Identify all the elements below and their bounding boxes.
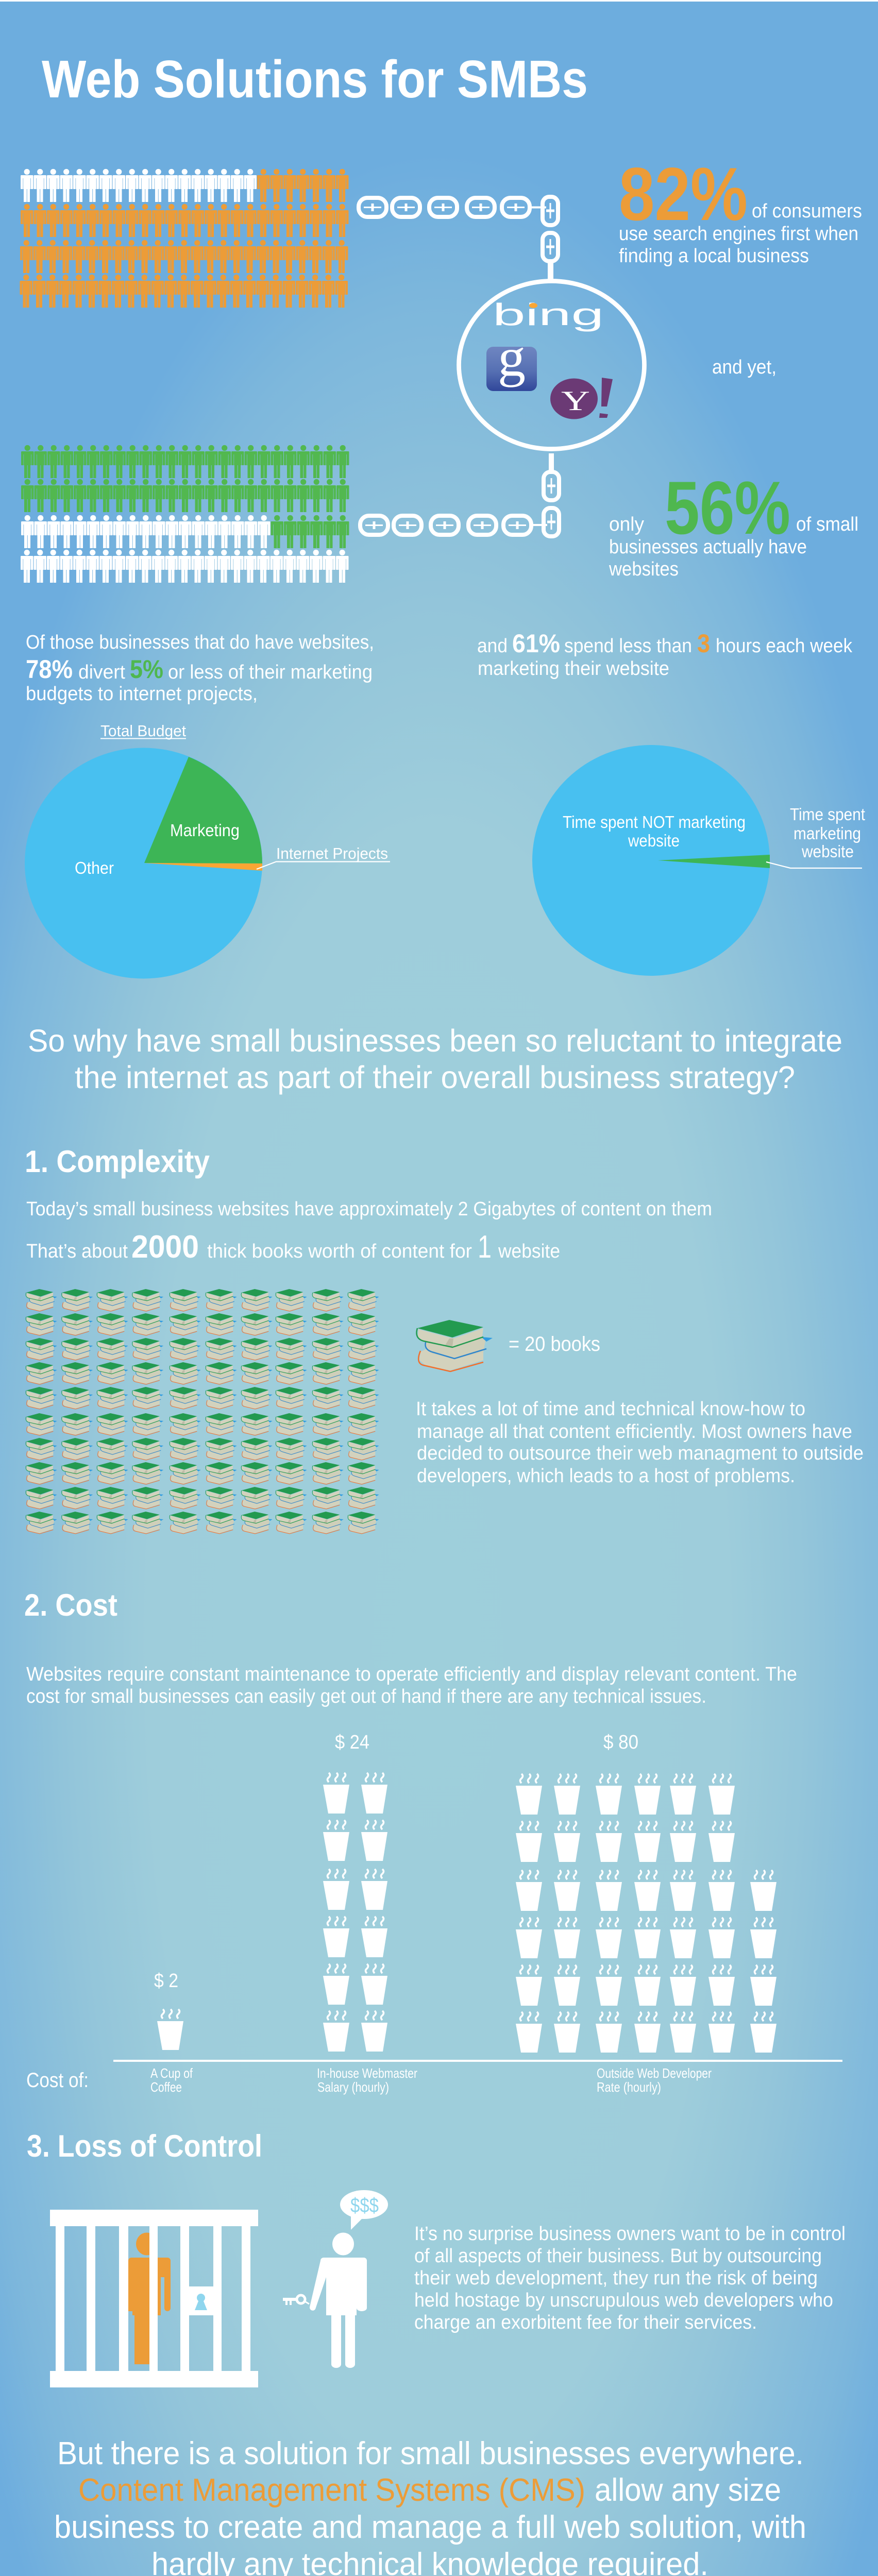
text: loss of control body: their web development, they run the risk of being [414,2267,818,2289]
figure: developer with key [283,2233,367,2368]
text: complexity intro: website [498,1241,560,1262]
text: complexity body: manage all that content efficiently. Most owners have [417,1421,852,1443]
section heading: complexity: 1. Complexity [25,1144,210,1179]
pie chart: total budget: Other [75,858,114,877]
pictogram: 82 percent people grid [20,169,348,308]
category: developer: Rate (hourly) [597,2079,661,2095]
text: budget stat: 78% [26,655,73,684]
callout: time spent marketing: website [801,842,854,861]
section heading: cost: 2. Cost [24,1588,117,1622]
chain: bottom [360,453,559,536]
icon: bing logo [493,297,604,332]
text: complexity intro: 2000 [131,1229,199,1265]
text: loss of control body: held hostage by unscrupulous web developers who [414,2290,833,2311]
callout: time spent marketing: marketing [793,824,861,843]
text: complexity intro: 1 [478,1229,492,1265]
value: 24 dollars: $ 24 [335,1732,369,1753]
category: webmaster [317,2065,417,2095]
pie chart: time spent: website [628,831,680,850]
search engine ring [459,281,644,449]
icon: key [283,2295,309,2305]
stat: 82 percent: 82% [619,152,748,236]
category: webmaster: Salary (hourly) [317,2079,389,2095]
pie chart: time spent [532,745,865,976]
icon: yahoo: Y [561,385,590,416]
label: total budget: Total Budget [100,722,186,740]
icon: google: g [498,327,526,387]
text: budget stat: Of those businesses that do have websites, [26,632,374,653]
text: complexity intro: That’s about [26,1241,128,1262]
text: loss of control body: of all aspects of their business. But by outsourcing [414,2245,822,2267]
icon: yahoo [550,378,613,419]
callout: time spent marketing [766,805,865,868]
text: loss of control body: It’s no surprise business owners want to be in control [414,2223,846,2245]
title: Web Solutions for SMBs [42,49,588,109]
value: 80 dollars: $ 80 [603,1732,638,1753]
text: complexity body: decided to outsource their web managment to outside [417,1443,864,1464]
pie chart: total budget [25,722,390,979]
stat: 82 percent [619,152,862,267]
section heading: loss of control: 3. Loss of Control [27,2129,262,2163]
pie chart: time spent: Time spent NOT marketing [563,812,746,832]
callout: time spent marketing: Time spent [790,805,865,824]
cups: coffee [157,2009,183,2050]
text: loss of control body [414,2223,846,2333]
text: and yet: and yet, [712,357,776,378]
text: complexity body: It takes a lot of time and technical know-how to [416,1398,805,1420]
text: time stat: 61% [512,629,560,658]
category: webmaster: In-house Webmaster [317,2065,417,2081]
text: complexity intro [26,1198,712,1265]
solution statement: business to create and manage a full web solution, with [54,2510,806,2545]
text: budget stat [26,632,374,705]
icon: google [486,327,537,391]
text: time stat: marketing their website [478,658,669,680]
stat: 56 percent: only [609,514,644,535]
text: time stat: 3 [697,629,710,658]
stat: 56 percent: 56% [665,466,790,550]
stat: 56 percent: of small [796,514,858,535]
text: time stat: spend less than [564,635,692,657]
chart: cost pictogram [26,1732,842,2095]
pictogram: 56 percent people grid [21,445,349,583]
cups: webmaster [323,1773,387,2052]
icon: bing logo: bing [493,297,604,332]
question heading [28,1023,842,1095]
illustration: caged owner [50,2210,258,2387]
text: complexity intro: thick books worth of content for [207,1241,472,1262]
stat: 56 percent: businesses actually have [609,536,807,558]
text: budget stat: or less of their marketing [168,662,373,683]
solution statement: But there is a solution for small businesses everywhere. [57,2436,804,2471]
value: 2 dollars: $ 2 [154,1970,178,1992]
category: developer: Outside Web Developer [597,2065,712,2081]
icon: keyhole [195,2294,207,2310]
stat: 82 percent: finding a local business [619,245,809,267]
text: complexity body: developers, which leads to a host of problems. [417,1465,795,1487]
cups: developer [516,1774,776,2053]
text: complexity body [416,1398,864,1487]
category: coffee: Coffee [150,2079,182,2095]
question heading: So why have small businesses been so reluctant to integrate [28,1023,842,1058]
text: time stat [477,629,853,680]
speech bubble: $$$ [350,2194,379,2217]
axis label: cost of: Cost of: [26,2069,89,2092]
cage [50,2210,258,2387]
text: loss of control body: charge an exorbitent fee for their services. [414,2312,757,2333]
solution statement [54,2436,806,2576]
chain: top [359,197,558,280]
solution statement: allow any size [595,2472,781,2508]
text: budget stat: divert [78,662,125,683]
category: coffee: A Cup of [150,2065,193,2081]
text: budget stat: 5% [130,655,163,684]
stat: 56 percent [609,466,858,580]
category: coffee [150,2065,193,2095]
text: time stat: and [477,635,508,657]
question heading: the internet as part of their overall business strategy? [75,1060,795,1095]
stat: 56 percent: websites [609,558,679,580]
text: time stat: hours each week [716,635,853,657]
text: complexity intro: Today’s small business websites have approximately 2 Gigabytes of content on them [26,1198,712,1220]
text: cost intro: Websites require constant maintenance to operate efficiently and display relevant content. The [26,1664,797,1685]
pictogram: book stacks grid [26,1289,379,1534]
callout: internet projects: Internet Projects [276,844,388,862]
icon: large book stack [416,1320,493,1371]
text: cost intro: cost for small businesses can easily get out of hand if there are any technical issues. [26,1686,706,1707]
stat: 82 percent: of consumers [752,200,862,222]
stat: 82 percent: use search engines first when [619,223,858,245]
figure: orange prisoner [128,2233,171,2364]
pie chart: total budget: Marketing [170,821,240,840]
speech bubble [340,2190,388,2230]
category: developer [597,2065,712,2095]
text: cost intro [26,1664,797,1707]
callout: internet projects [257,844,390,869]
legend: 20 books: = 20 books [509,1333,600,1355]
solution statement: Content Management Systems (CMS) [78,2472,585,2508]
text: budget stat: budgets to internet projects, [26,683,258,705]
